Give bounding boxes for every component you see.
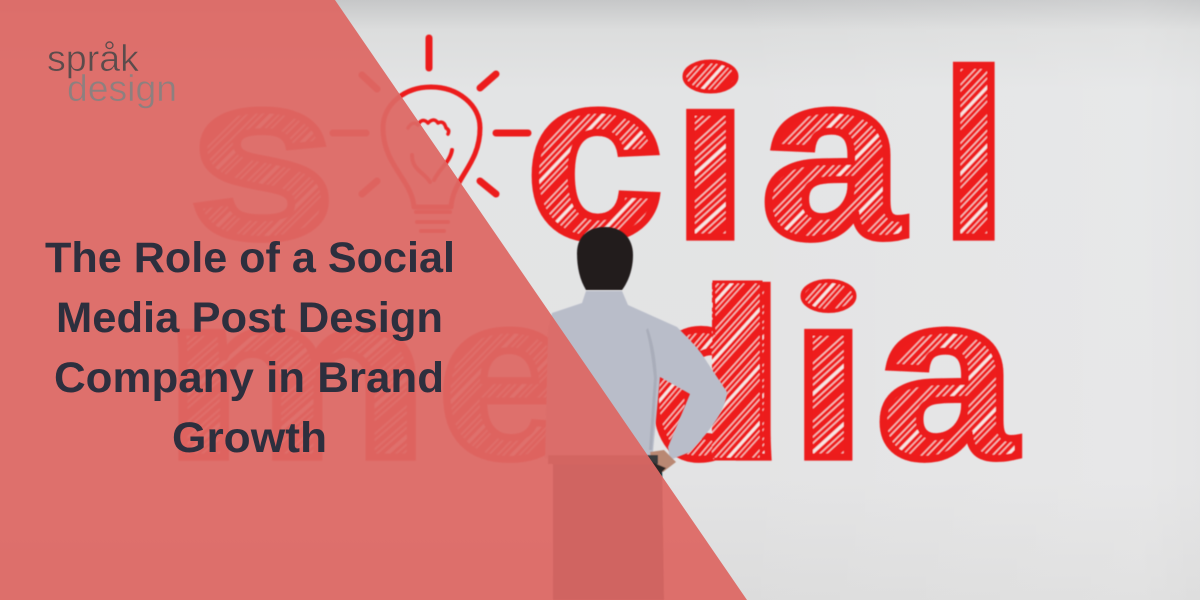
person seen from behind xyxy=(545,227,727,600)
shirt xyxy=(545,291,727,462)
word: media: a xyxy=(876,244,1019,507)
title: The Role of a Social xyxy=(45,234,455,282)
title: Company in Brand xyxy=(54,354,444,402)
wall lettering: Social media xyxy=(162,23,1019,508)
hand at hip xyxy=(650,450,676,472)
title: Media Post Design xyxy=(56,294,443,342)
title: Growth xyxy=(172,414,327,462)
word: media xyxy=(162,243,1019,508)
hair xyxy=(577,227,633,290)
logo: språk design: språk xyxy=(47,38,140,79)
word: Social: l xyxy=(939,23,1008,288)
word: media: m xyxy=(162,244,430,508)
title xyxy=(45,234,455,462)
logo: språk design xyxy=(47,38,177,109)
icon: light bulb with rays xyxy=(333,38,528,231)
word: Social: c xyxy=(526,25,664,288)
word: media: d xyxy=(646,243,783,507)
logo: språk design: design xyxy=(67,68,177,109)
word: media: ı xyxy=(788,244,868,507)
word: Social: s xyxy=(189,24,336,288)
trousers xyxy=(553,462,664,600)
belt xyxy=(548,455,658,464)
word: Social: ı xyxy=(670,24,750,287)
word: Social xyxy=(189,23,1008,288)
red diagonal overlay panel xyxy=(0,0,747,600)
word: Social: a xyxy=(761,25,906,288)
shirt shading xyxy=(646,328,657,450)
word: media: e xyxy=(437,244,578,507)
